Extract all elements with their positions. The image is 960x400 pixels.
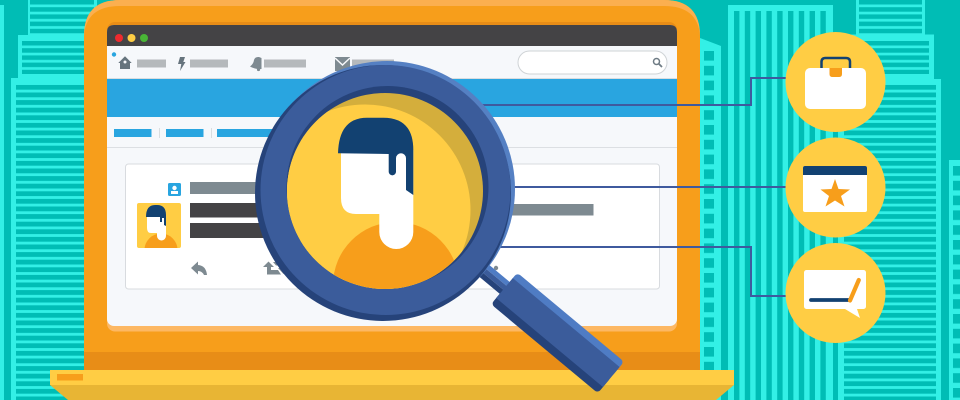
left city buildings	[0, 0, 98, 400]
handle	[464, 250, 624, 393]
browser title bar	[107, 25, 677, 46]
lens frame	[255, 61, 515, 321]
laptop	[50, 0, 734, 400]
laptop base	[50, 370, 734, 400]
connector line: calendar	[505, 186, 787, 188]
navigation bar	[112, 52, 394, 71]
profile badge icon	[168, 183, 181, 196]
tab bar	[107, 128, 677, 148]
screen	[107, 25, 677, 326]
magnifying glass	[255, 61, 624, 393]
like icon remnant	[494, 266, 498, 270]
reply icon	[191, 262, 207, 275]
search box	[518, 51, 667, 74]
avatar thumbnail	[137, 203, 181, 248]
icon circle: message with pencil	[786, 243, 886, 343]
hair	[338, 118, 413, 195]
connector line: briefcase	[470, 78, 787, 105]
blue banner	[107, 78, 677, 117]
body	[334, 224, 454, 289]
icon circle: briefcase	[786, 32, 886, 132]
laptop lid	[84, 0, 700, 400]
right city buildings	[700, 0, 960, 400]
retweet icon	[263, 262, 289, 274]
lens content: person	[287, 93, 483, 289]
connector line: message	[495, 247, 787, 296]
profile card	[126, 164, 660, 289]
face and neck	[341, 150, 413, 249]
icon circle: calendar star	[786, 138, 886, 238]
card text bars	[190, 182, 594, 238]
